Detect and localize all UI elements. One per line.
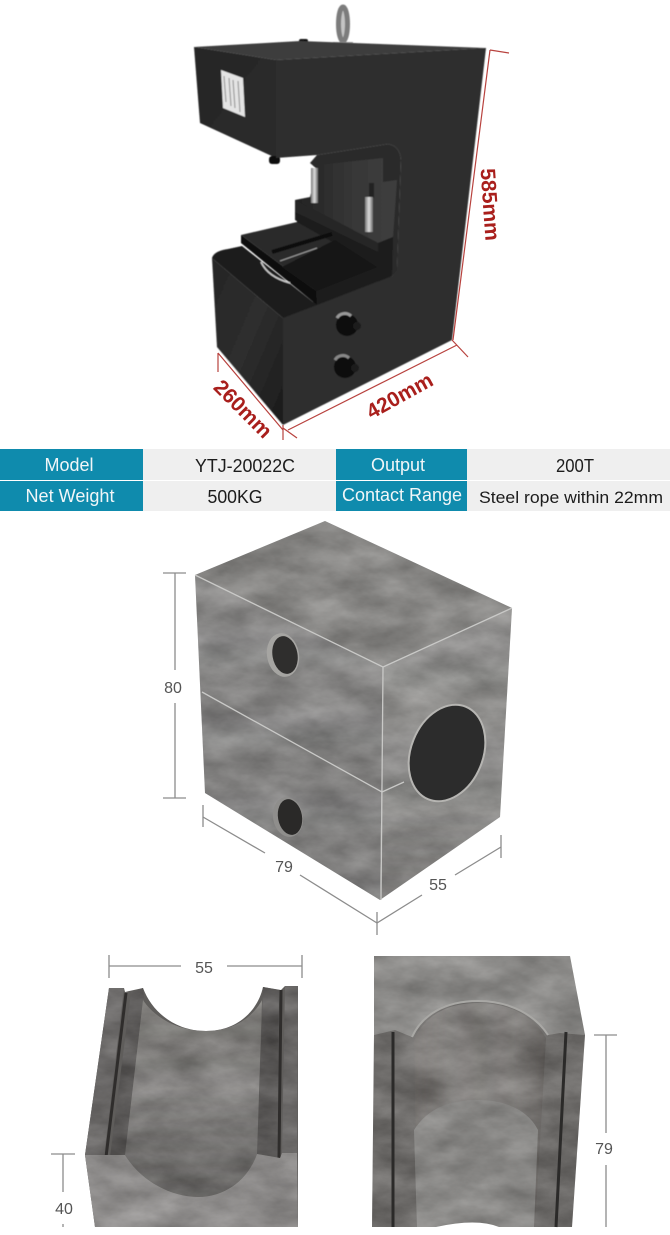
dimension: depth 260mm [209, 353, 297, 443]
dimension: depth 260mm: 260mm [209, 376, 276, 443]
half die front face [85, 1153, 298, 1227]
product photo: press machine [194, 7, 486, 425]
dimension: block width 55: 55 [429, 877, 447, 894]
value cell: 500KG: 500KG [208, 487, 262, 507]
lifting eye bolt [333, 7, 354, 50]
half die outer rails [85, 986, 298, 1157]
photo: half die end view [85, 986, 298, 1227]
header cell: Net Weight: Net Weight [26, 486, 114, 506]
dimension: block length 79: 79 [275, 859, 293, 876]
dimension: half die length 79 [594, 1035, 617, 1227]
half die body [85, 986, 298, 1227]
half die grooves [106, 990, 281, 1158]
header cell: Net Weight [0, 481, 143, 511]
header cell: Output: Output [371, 455, 425, 475]
channel body [372, 1000, 585, 1227]
lower threaded hole [270, 795, 306, 839]
adjustment knob 2 [334, 356, 359, 378]
lighter bore section [414, 1100, 538, 1227]
half die inner rails [110, 987, 279, 1158]
block right face [380, 608, 512, 900]
dimension: block height 80 [163, 573, 186, 798]
guide pins [311, 168, 374, 232]
adjustment knob 1 [336, 314, 361, 336]
dimension: width 420mm [288, 340, 468, 430]
base side face [212, 258, 283, 425]
photo: half die top view [372, 956, 585, 1227]
dimension: half die width 55 [109, 955, 302, 978]
block edge highlights [195, 575, 512, 900]
value cell: YTJ-20022C: YTJ-20022C [195, 456, 295, 476]
value cell: 200T: 200T [556, 456, 594, 476]
dimension: block height 80: 80 [164, 680, 182, 697]
dimension: half die height 40: 40 [55, 1201, 73, 1218]
value cell: Steel rope within 22mm [467, 481, 670, 511]
main body face [276, 48, 486, 425]
base top [212, 246, 317, 318]
upper threaded hole [263, 631, 303, 679]
dimension: width 420mm: 420mm [363, 369, 437, 424]
dimension: height 585mm [453, 50, 509, 340]
value cell: 500KG [143, 481, 336, 511]
value cell: Steel rope within 22mm: Steel rope within 22mm [479, 488, 663, 507]
top surface [194, 41, 486, 60]
top screw [299, 39, 308, 48]
block left face [195, 575, 383, 900]
dimension: height 585mm: 585mm [475, 168, 503, 241]
header cell: Model [0, 449, 143, 480]
header cell: Contact Range: Contact Range [342, 485, 462, 505]
nameplate [221, 70, 245, 117]
value cell: YTJ-20022C [143, 449, 336, 480]
throat back plate [295, 158, 397, 270]
specification table [0, 449, 670, 511]
header cell: Model: Model [44, 455, 94, 475]
lower jaw block [295, 200, 393, 305]
sliding platen [241, 222, 377, 305]
value cell: 200T [467, 449, 670, 480]
dimension: block length 79 [203, 805, 377, 935]
throat arch [310, 144, 401, 282]
side knob [269, 156, 280, 164]
large bore [395, 693, 499, 813]
channel grooves [393, 1032, 566, 1227]
dimension: half die length 79: 79 [595, 1141, 613, 1158]
dimension: half die width 55: 55 [195, 960, 213, 977]
block top face [195, 521, 512, 667]
dimension: block width 55 [377, 835, 501, 923]
bore channel [414, 1003, 546, 1227]
bottom notch [436, 1222, 499, 1227]
header cell: Contact Range [336, 481, 467, 511]
upper side face [194, 47, 276, 158]
dimension: half die height 40 [51, 1154, 75, 1227]
bore rim [412, 1001, 548, 1037]
top face [374, 956, 585, 1037]
photo: steel die block assembled [195, 521, 512, 900]
header cell: Output [336, 449, 467, 480]
half die trough [125, 1000, 262, 1197]
